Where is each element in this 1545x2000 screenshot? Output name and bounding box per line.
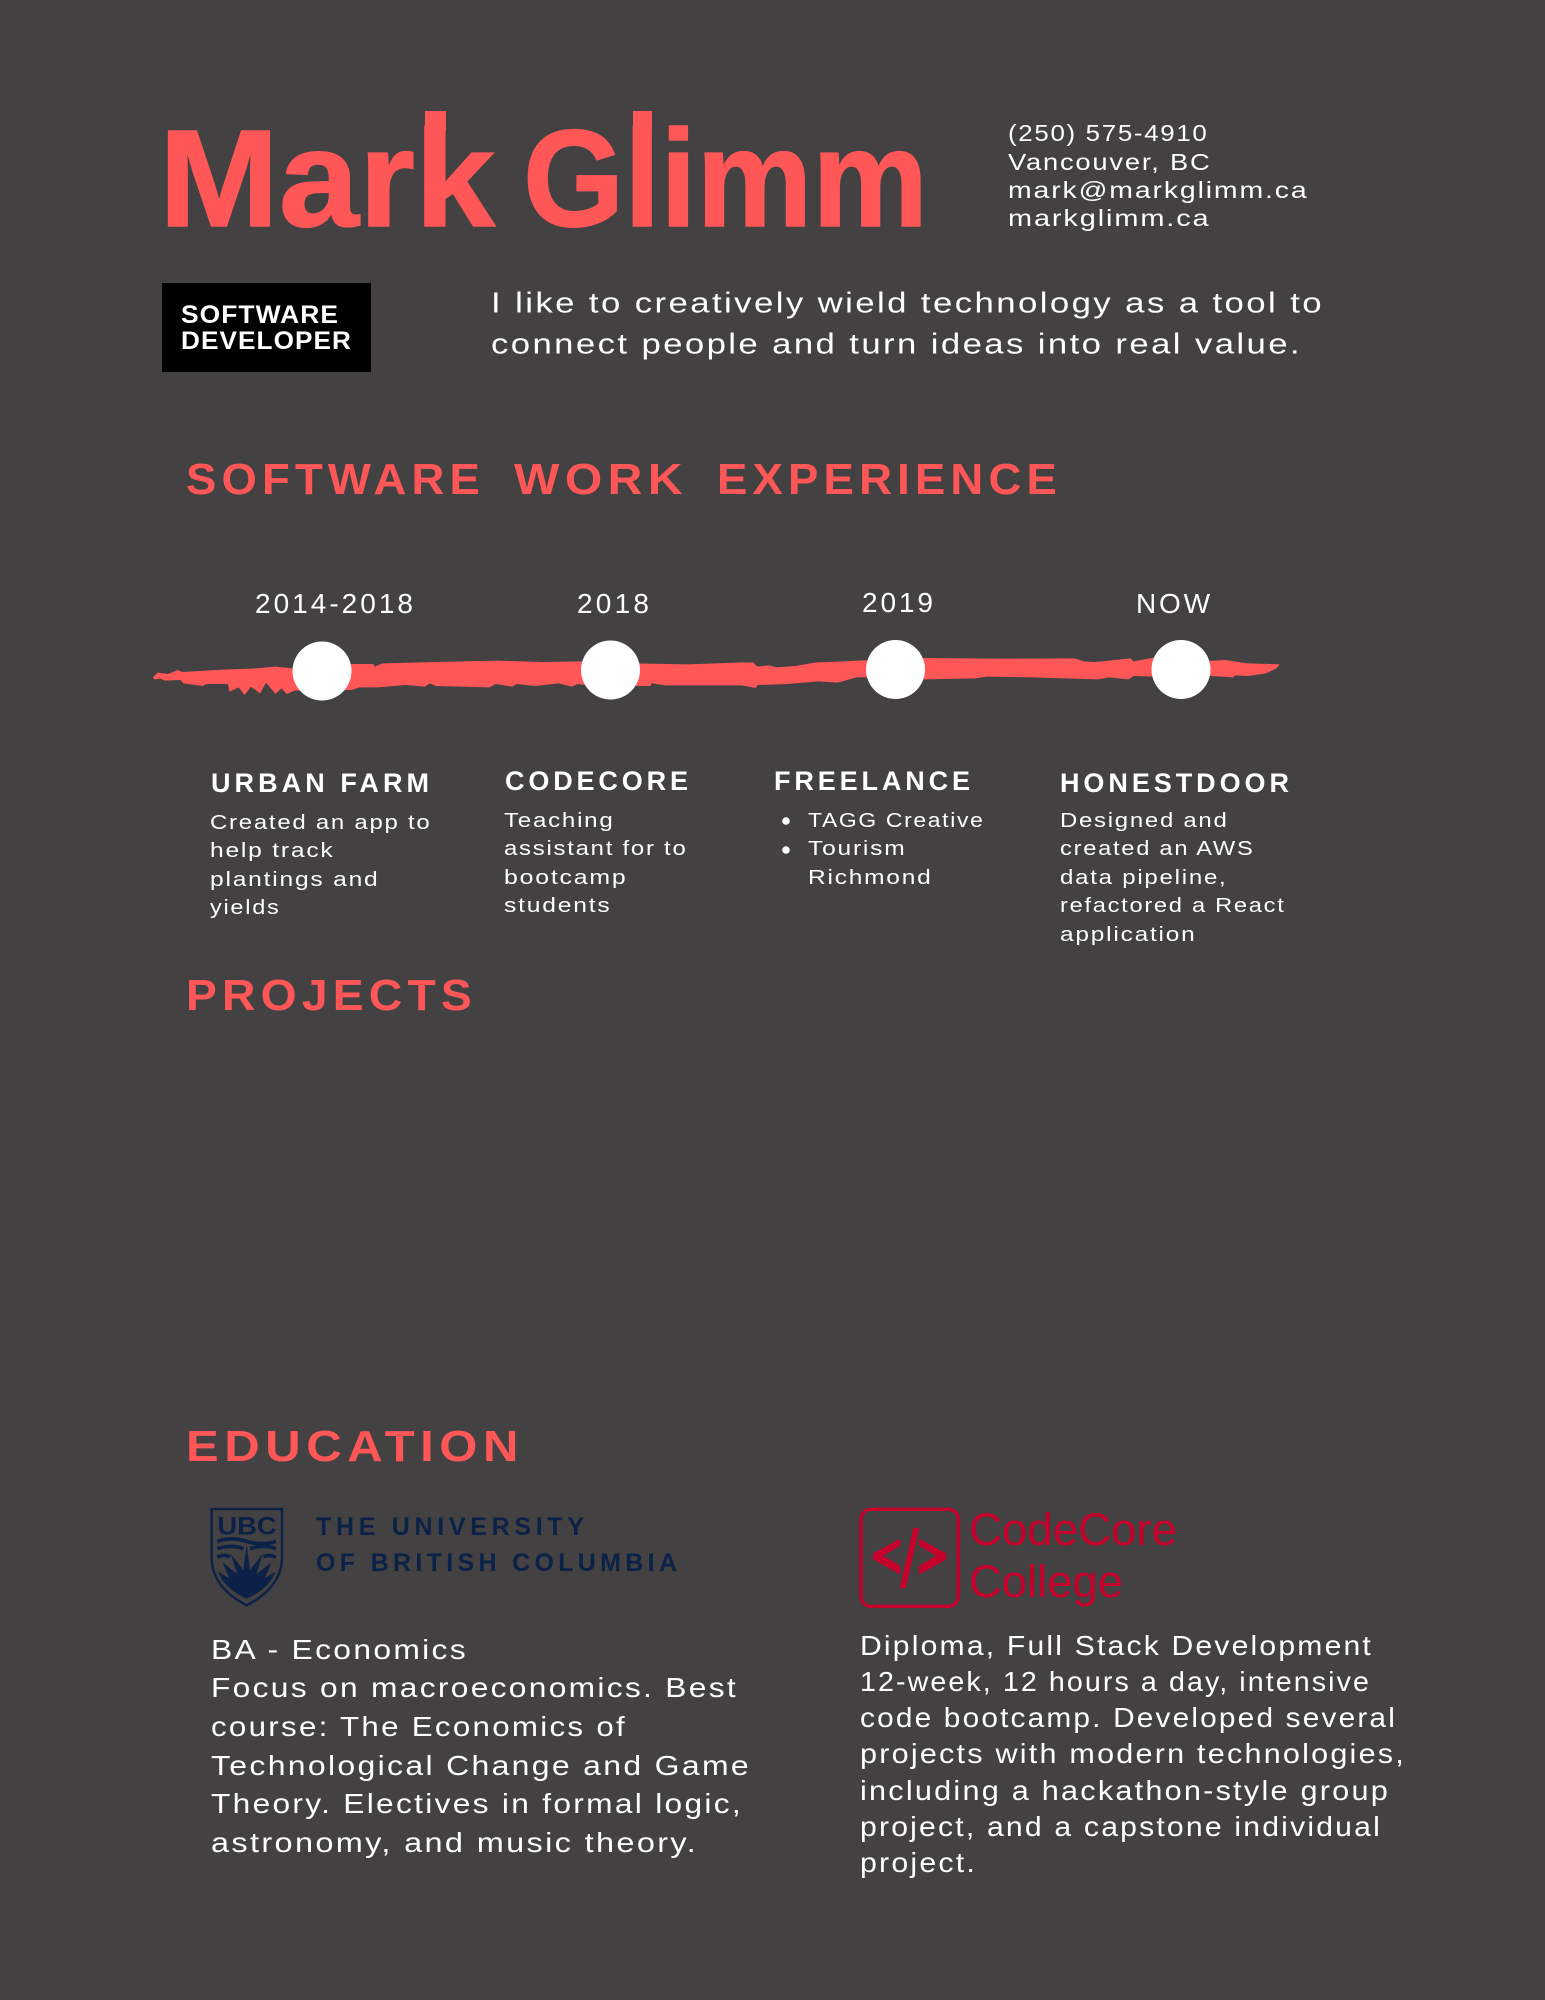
job: codecore: assistant for to	[504, 837, 688, 860]
tagline	[491, 288, 1324, 360]
badge: software developer: DEVELOPER	[181, 327, 352, 355]
text: CodeCore diploma: project.	[860, 1847, 977, 1878]
job: urban farm: help track	[210, 839, 334, 862]
wordmark: codecore college	[969, 1504, 1177, 1607]
text: UBC degree: Focus on macroeconomics. Best	[211, 1672, 738, 1703]
job: codecore: bootcamp	[504, 866, 628, 889]
text: CodeCore diploma: code bootcamp. Developed several	[860, 1702, 1397, 1733]
heading: software work experience	[186, 455, 1062, 504]
heading: projects: PROJECTS	[186, 971, 477, 1020]
job: codecore: Teaching	[504, 809, 614, 832]
contact details: markglimm.ca	[1008, 205, 1210, 231]
job: honestdoor: HONESTDOOR	[1060, 768, 1289, 798]
text: UBC degree: Theory. Electives in formal logic,	[211, 1788, 743, 1819]
job: freelance: FREELANCE	[774, 766, 970, 796]
contact details	[1008, 120, 1308, 231]
year labels	[255, 587, 1211, 619]
icon: UBC shield	[212, 1509, 282, 1605]
wordmark: codecore college: College	[969, 1556, 1123, 1607]
job: honestdoor: data pipeline,	[1060, 866, 1228, 889]
title: Mark Glimm	[159, 102, 928, 256]
brush stroke line	[153, 657, 1280, 695]
text: UBC degree: astronomy, and music theory.	[211, 1827, 698, 1858]
wordmark: the university of british columbia: OF BRITISH COLUMBIA	[316, 1549, 677, 1577]
heading: software work experience: EXPERIENCE	[717, 455, 1062, 504]
job: freelance: Tourism	[808, 837, 906, 860]
year labels: NOW	[1136, 588, 1211, 619]
job: codecore: CODECORE	[505, 766, 688, 796]
milestone dots	[292, 640, 1210, 700]
text: CodeCore diploma	[860, 1630, 1406, 1878]
badge: software developer: SOFTWARE	[181, 301, 339, 329]
text: CodeCore diploma: Diploma, Full Stack Development	[860, 1630, 1373, 1661]
job: codecore	[504, 766, 688, 917]
wordmark: the university of british columbia: THE UNIVERSITY	[316, 1513, 584, 1541]
logo: UBC	[212, 1509, 677, 1605]
job: urban farm: yields	[210, 896, 280, 919]
job: urban farm: Created an app to	[210, 811, 432, 834]
tagline: I like to creatively wield technology as a tool to	[491, 288, 1324, 320]
text: CodeCore diploma: project, and a capstone individual	[860, 1811, 1382, 1842]
title: Mark Glimm: Glimm	[523, 102, 928, 256]
job: honestdoor: Designed and	[1060, 809, 1228, 832]
logo: CodeCore College	[861, 1504, 1177, 1607]
job: freelance	[774, 766, 984, 889]
job: urban farm: URBAN FARM	[211, 768, 429, 798]
job: urban farm	[210, 768, 432, 919]
wordmark: the university of british columbia	[316, 1513, 677, 1577]
contact details: (250) 575-4910	[1008, 120, 1208, 146]
heading: education: EDUCATION	[186, 1422, 524, 1471]
contact details: mark@markglimm.ca	[1008, 177, 1308, 203]
job: urban farm: plantings and	[210, 868, 380, 891]
tagline: connect people and turn ideas into real value.	[491, 328, 1302, 360]
text: CodeCore diploma: 12-week, 12 hours a day, intensive	[860, 1666, 1371, 1697]
contact details: Vancouver, BC	[1008, 149, 1212, 175]
text: UBC degree	[211, 1634, 751, 1858]
job: honestdoor: created an AWS	[1060, 837, 1254, 860]
heading: software work experience: WORK	[514, 455, 688, 504]
job: codecore: students	[504, 894, 612, 917]
heading: software work experience: SOFTWARE	[186, 455, 485, 504]
job: freelance: TAGG Creative	[808, 809, 984, 832]
job: freelance: Richmond	[808, 866, 932, 889]
year labels: 2018	[577, 588, 649, 619]
wordmark: codecore college: CodeCore	[969, 1504, 1177, 1555]
badge: software developer	[162, 283, 371, 372]
job: honestdoor	[1060, 768, 1289, 946]
icon: UBC shield: UBC	[217, 1513, 277, 1541]
icon: code brackets	[861, 1509, 958, 1606]
job: honestdoor: application	[1060, 923, 1196, 946]
year labels: 2014-2018	[255, 588, 413, 619]
text: CodeCore diploma: projects with modern technologies,	[860, 1738, 1406, 1769]
text: UBC degree: Technological Change and Game	[211, 1750, 751, 1781]
year labels: 2019	[862, 587, 933, 618]
text: CodeCore diploma: including a hackathon-style group	[860, 1775, 1390, 1806]
timeline	[153, 587, 1289, 946]
title: Mark Glimm: Mark	[159, 102, 495, 256]
text: UBC degree: course: The Economics of	[211, 1711, 627, 1742]
job: honestdoor: refactored a React	[1060, 894, 1286, 917]
text: UBC degree: BA - Economics	[211, 1634, 468, 1665]
